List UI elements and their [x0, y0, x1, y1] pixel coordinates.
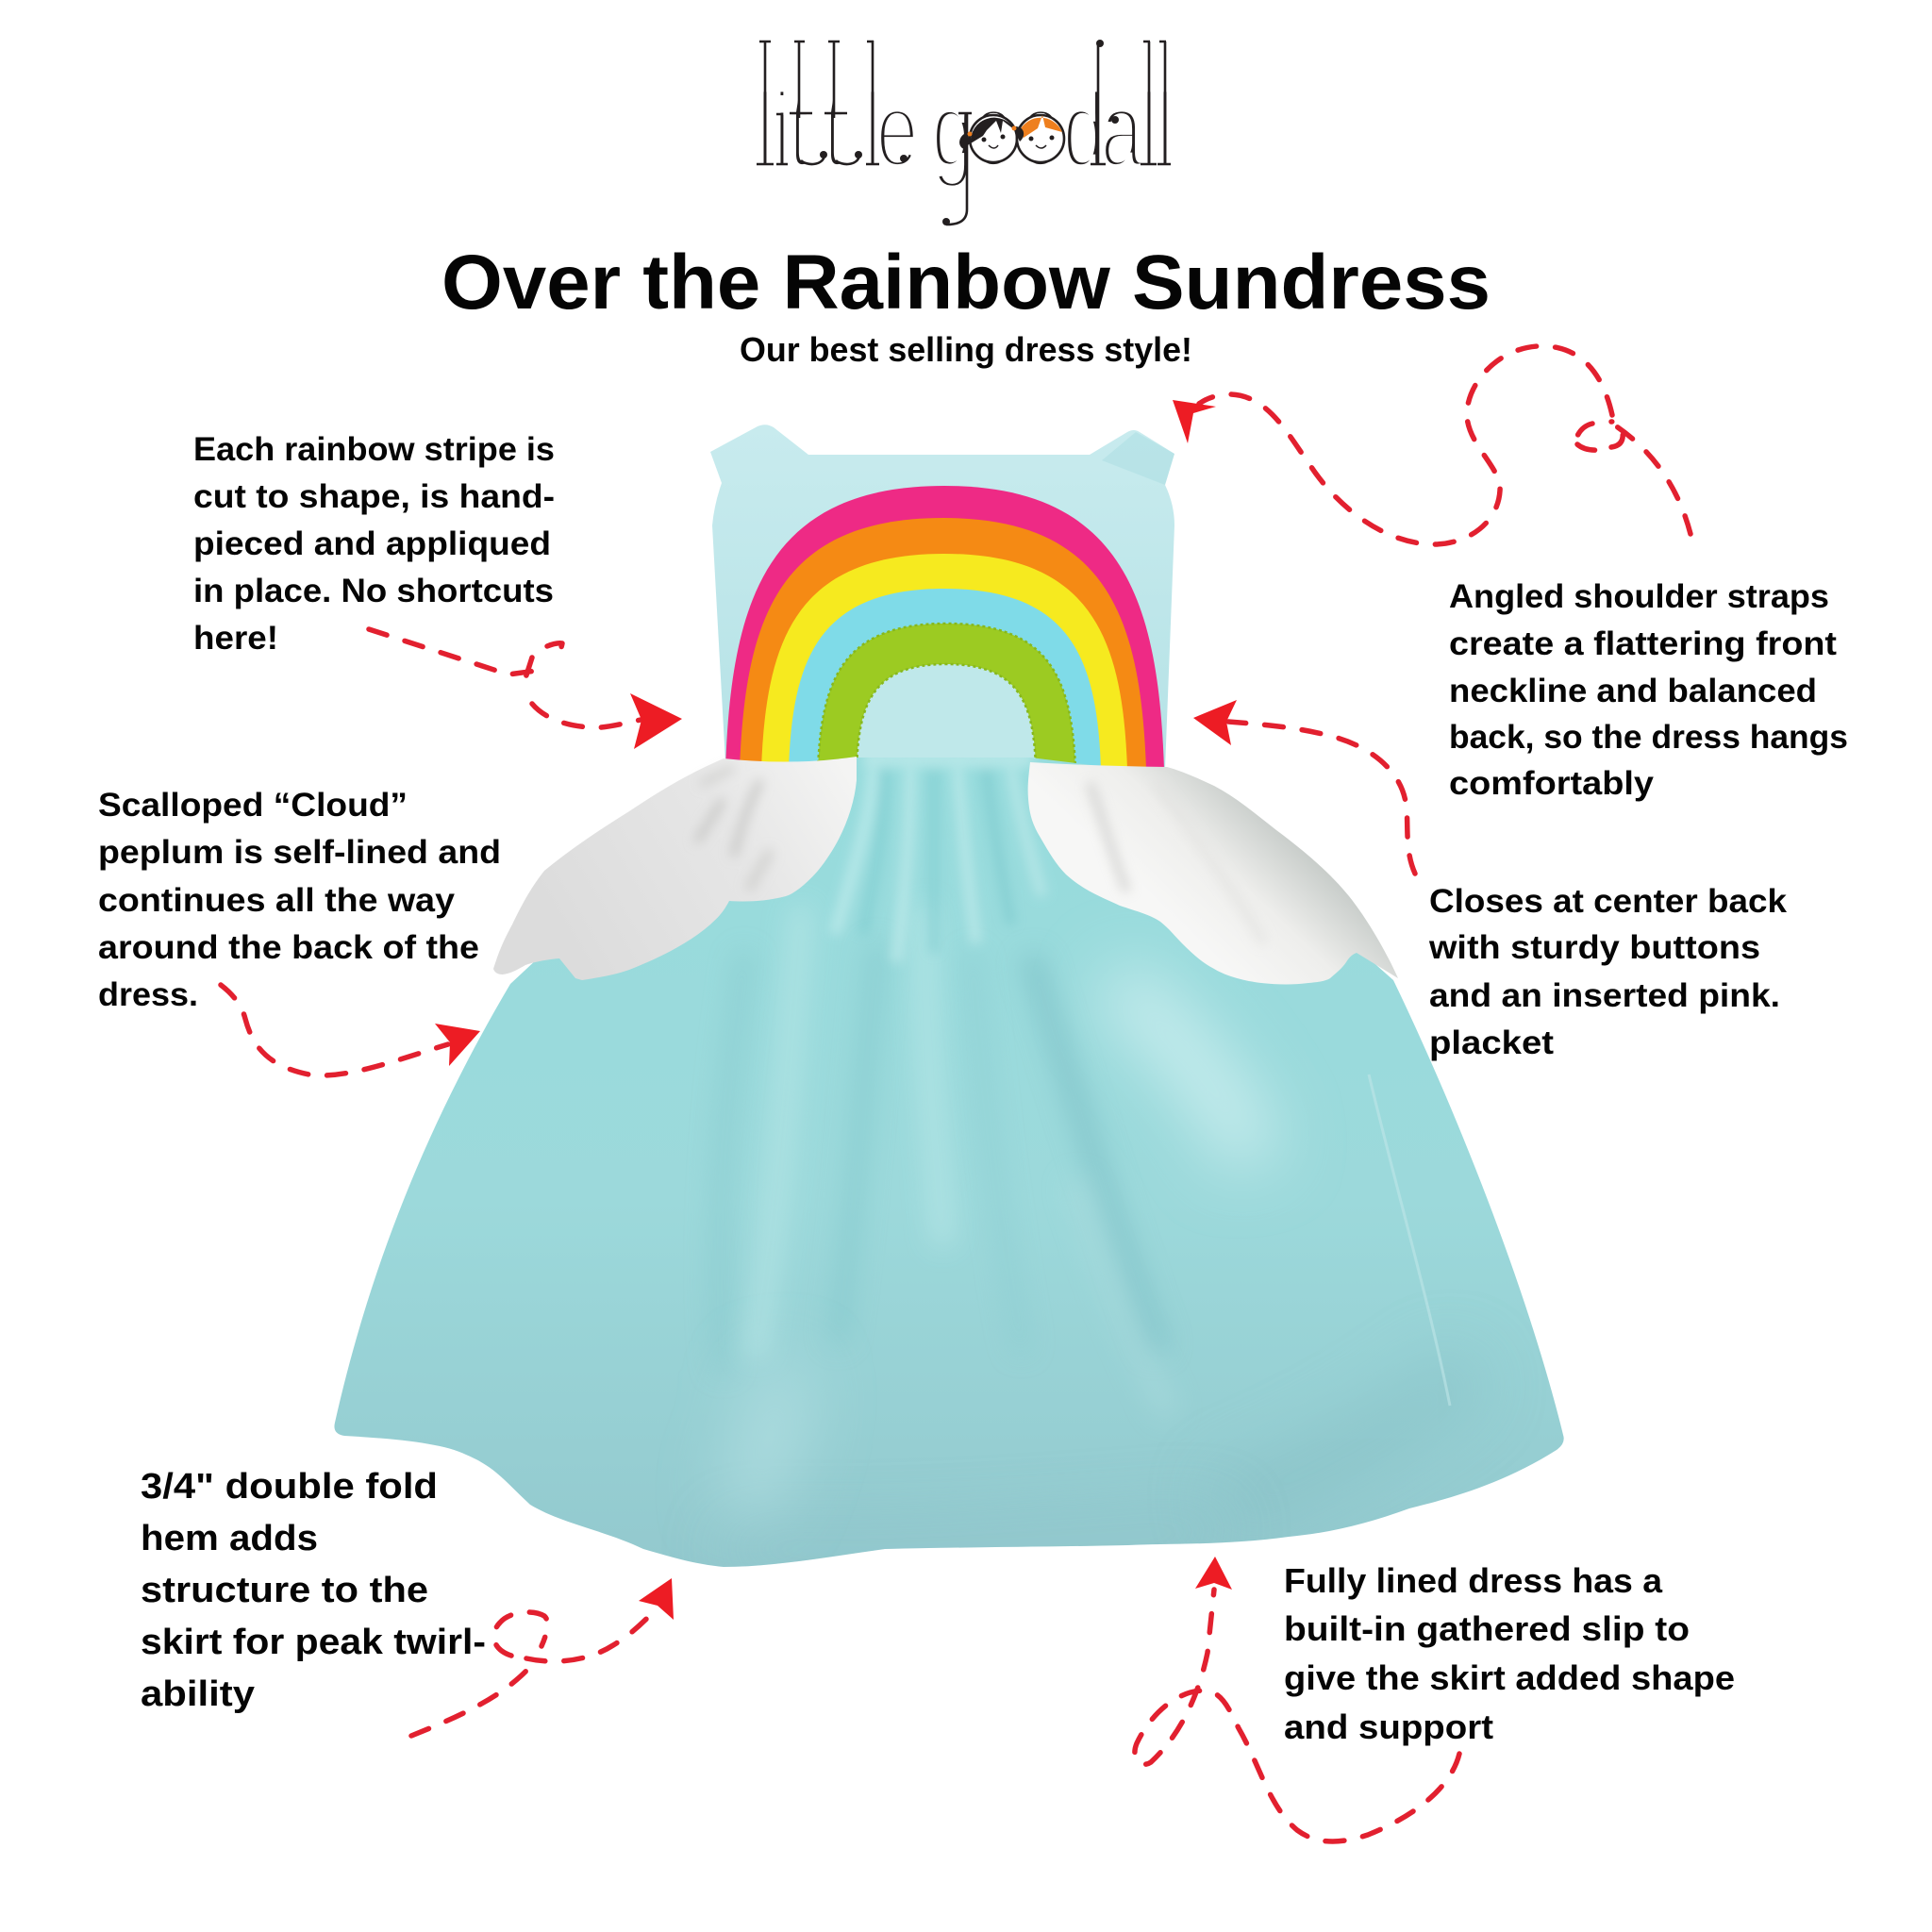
callout text: lining [1284, 1561, 1735, 1746]
callout text: closure: and an inserted pink. [1429, 977, 1780, 1014]
callout text: shoulder straps: back, so the dress hangs [1449, 719, 1848, 756]
gathers under the waist [835, 759, 1042, 962]
callout text: shoulder straps [1449, 578, 1848, 802]
callout text: rainbow stripe: pieced and appliqued [193, 525, 551, 562]
callout text: shoulder straps: Angled shoulder straps [1449, 578, 1829, 615]
callout text: lining: and support [1284, 1707, 1493, 1746]
callout text: shoulder straps: comfortably [1449, 765, 1655, 802]
strap fold shading [1102, 432, 1174, 485]
callout text: rainbow stripe [193, 431, 555, 657]
logo wordmark: little: l [757, 71, 774, 189]
callout text: cloud peplum: dress. [98, 976, 198, 1013]
rainbow appliqué [725, 486, 1164, 769]
logo wordmark: goodall: d [1063, 71, 1105, 189]
callout text: closure [1428, 883, 1788, 1061]
arrow: hem [411, 1578, 674, 1736]
callout text: cloud peplum: peplum is self-lined and [98, 834, 501, 871]
arrow: shoulder straps [1173, 346, 1690, 544]
logo: little goodall [757, 40, 1174, 225]
logo wordmark: little: l [864, 71, 881, 189]
callout text: closure: Closes at center back [1429, 883, 1788, 920]
callout text: cloud peplum [98, 787, 501, 1013]
callout text: hem: structure to the [141, 1571, 428, 1610]
icon: right child face [1011, 115, 1064, 162]
arrow: cloud peplum [221, 985, 480, 1075]
arrow: rainbow stripe [369, 629, 682, 749]
logo wordmark: little: i [774, 71, 791, 189]
callout text: closure: with sturdy buttons [1428, 929, 1760, 966]
callout text: rainbow stripe: Each rainbow stripe is [193, 431, 555, 468]
logo wordmark: little: e [876, 71, 918, 189]
logo wordmark: goodall: a [1101, 71, 1143, 189]
logo wordmark: little [757, 41, 918, 189]
callout text: hem: hem adds [141, 1519, 318, 1558]
callout text: rainbow stripe: cut to shape, is hand- [193, 478, 555, 515]
callout text: lining: Fully lined dress has a [1284, 1561, 1663, 1600]
logo wordmark: goodall: o [973, 71, 1014, 189]
logo wordmark: little: t [789, 71, 809, 189]
logo wordmark: goodall: g [932, 71, 974, 189]
icon: left child face [959, 115, 1017, 162]
logo wordmark: goodall: o [1020, 71, 1061, 189]
logo wordmark: little: t [824, 71, 844, 189]
bodice with shoulder straps [710, 425, 1174, 769]
callout text: hem: ability [141, 1674, 255, 1714]
right cloud peplum [1028, 762, 1398, 985]
callout text: cloud peplum: around the back of the [98, 929, 479, 966]
dress illustration [321, 425, 1585, 1585]
callout text: hem: skirt for peak twirl- [141, 1623, 486, 1662]
title: Over the Rainbow Sundress [441, 240, 1491, 325]
left cloud peplum [493, 757, 857, 980]
callout text: lining: give the skirt added shape [1284, 1658, 1735, 1697]
callout text: closure: placket [1429, 1024, 1554, 1061]
callout text: cloud peplum: continues all the way [98, 882, 456, 919]
callout text: cloud peplum: Scalloped “Cloud” [98, 787, 408, 824]
skirt [321, 736, 1585, 1585]
logo wordmark: goodall: l [1141, 71, 1158, 189]
callout text: shoulder straps: neckline and balanced [1449, 673, 1817, 709]
callout text: hem [141, 1467, 486, 1714]
arrow: closure [1193, 700, 1415, 874]
callout text: shoulder straps: create a flattering front [1449, 625, 1837, 662]
subtitle: Our best selling dress style! [740, 330, 1192, 369]
logo wordmark: goodall [932, 40, 1174, 225]
arrow: lining [1135, 1557, 1459, 1841]
callout text: hem: 3/4" double fold [141, 1467, 438, 1507]
callout text: rainbow stripe: in place. No shortcuts [193, 573, 554, 609]
logo wordmark: goodall: l [1157, 71, 1174, 189]
callout text: rainbow stripe: here! [193, 620, 278, 657]
callout text: lining: built-in gathered slip to [1284, 1609, 1690, 1648]
